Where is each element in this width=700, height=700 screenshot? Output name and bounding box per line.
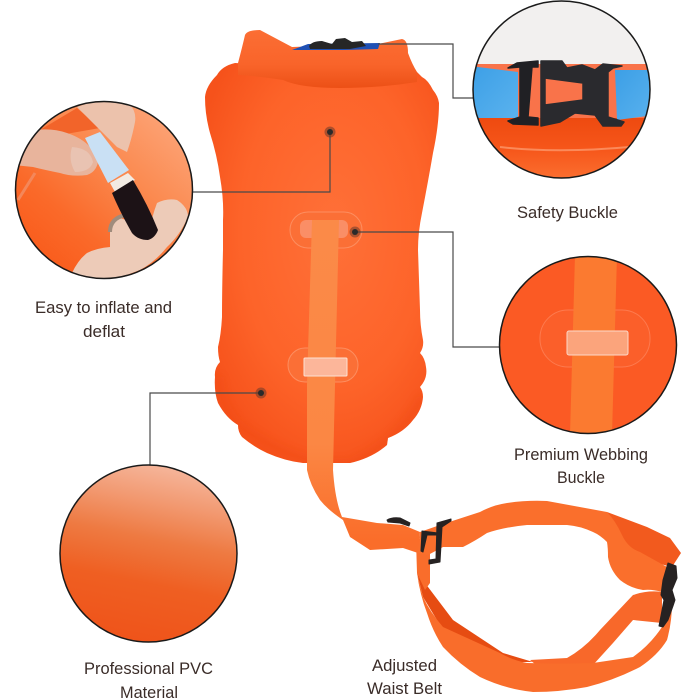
label: premium webbing buckle [514, 445, 648, 487]
label: easy to inflate: deflat [83, 322, 125, 341]
label: adjusted waist belt: Waist Belt [367, 679, 442, 698]
buckle body [541, 61, 624, 126]
strap connector through slider [416, 535, 430, 590]
label: easy to inflate: Easy to inflate and [35, 298, 172, 317]
back band [607, 512, 681, 567]
label: premium webbing buckle: Premium Webbing [514, 445, 648, 464]
detail circle: premium webbing [495, 255, 681, 435]
dark underside strip [417, 573, 533, 662]
swim buoy bag [205, 30, 439, 464]
label: easy to inflate [35, 298, 172, 341]
bag body [205, 63, 439, 463]
belt buckles [387, 518, 677, 627]
callout lines [150, 44, 499, 465]
detail circle: inflation valve [14, 100, 194, 280]
upper webbing patch [290, 212, 362, 248]
label: professional PVC material: Professional PVC [84, 659, 213, 678]
inner return strap [530, 591, 662, 668]
buckle frame [508, 61, 538, 125]
bag puffy edge shading [218, 377, 423, 464]
label: premium webbing buckle: Buckle [557, 468, 605, 487]
detail circle: PVC material [59, 464, 238, 643]
callout dots [256, 126, 360, 398]
webbing strap [307, 220, 420, 553]
label: adjusted waist belt [367, 656, 442, 698]
detail circle: safety buckle [470, 0, 655, 180]
clear strap loop [304, 358, 347, 376]
label: adjusted waist belt: Adjusted [372, 656, 437, 675]
front band [418, 501, 667, 592]
label: professional PVC material [84, 659, 213, 700]
lower loop [417, 573, 672, 692]
waist belt [416, 501, 681, 692]
roll top closure [238, 30, 417, 88]
blue strap and top buckle [292, 38, 380, 50]
lower webbing patch [288, 348, 358, 382]
label: safety buckle: Safety Buckle [517, 203, 618, 222]
